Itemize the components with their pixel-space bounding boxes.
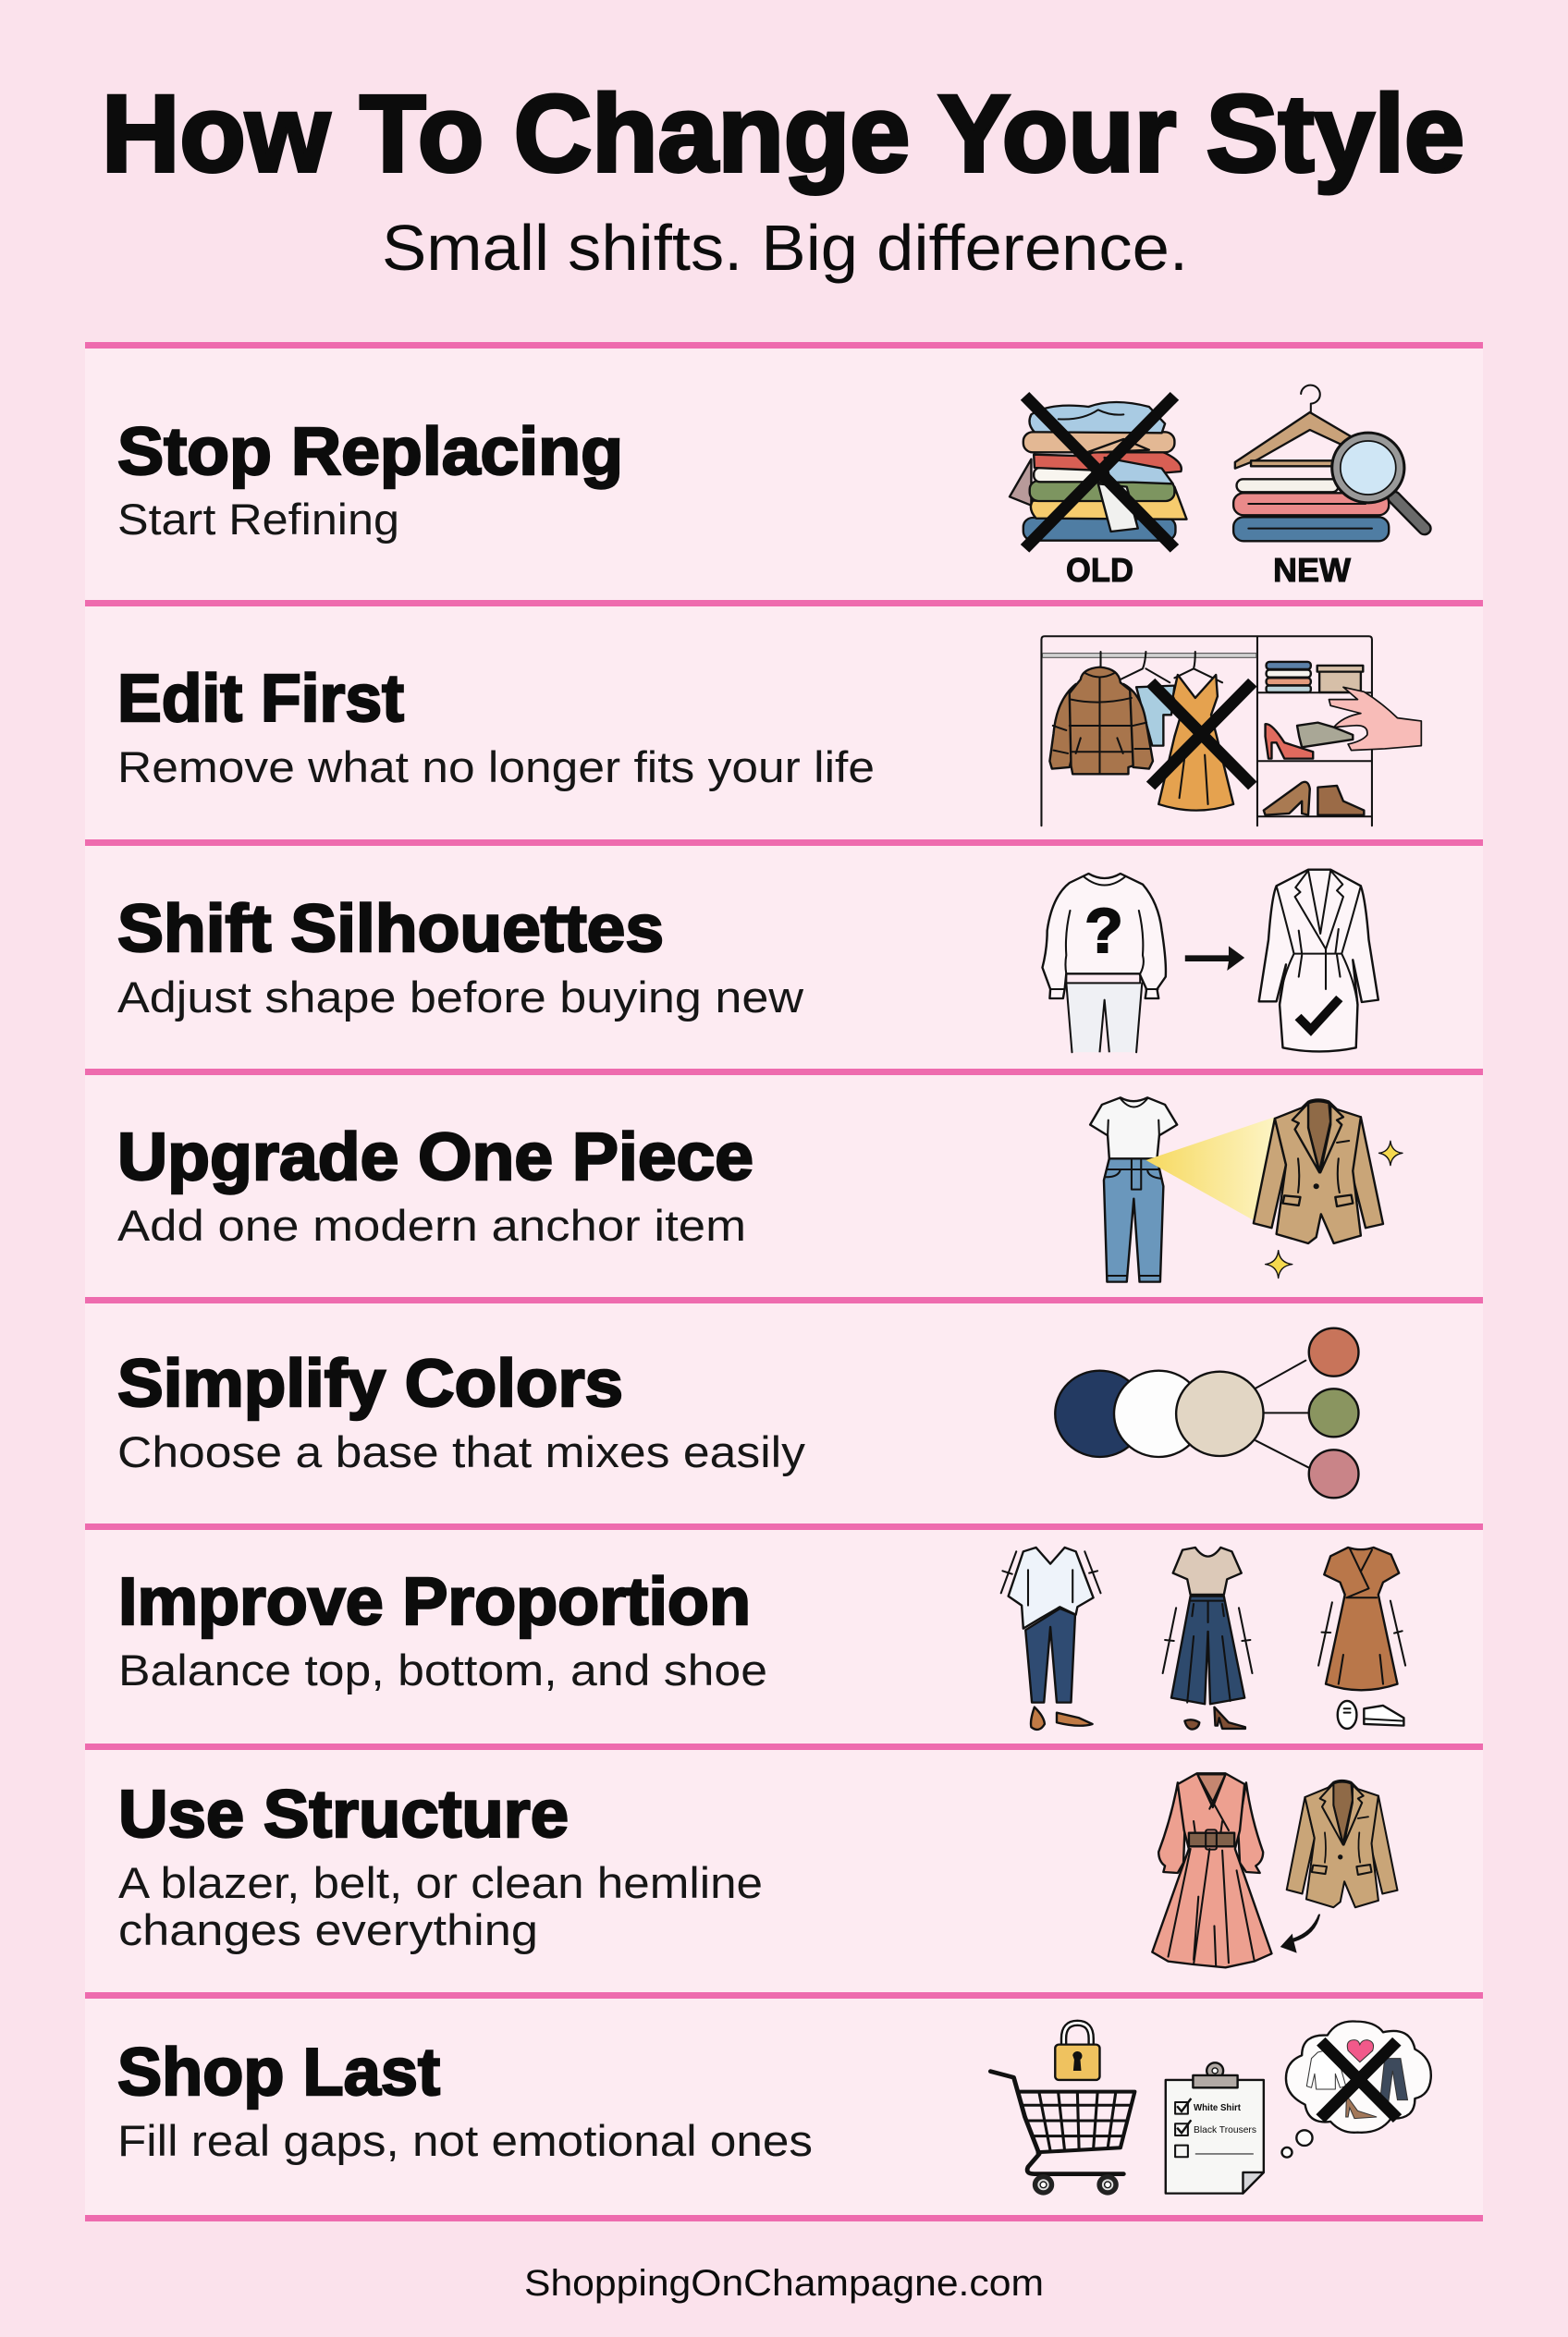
icon: old clothes pile crossed out	[1010, 396, 1187, 548]
icon: thought bubble crossed out	[1281, 2021, 1431, 2158]
heading: stop replacing: Stop Replacing	[117, 415, 623, 489]
outfit: wrap dress and sneakers	[1318, 1548, 1405, 1729]
divider lines	[85, 342, 1483, 2221]
checklist item: white shirt: White Shirt	[1194, 2102, 1241, 2113]
icon: shopping cart with lock	[990, 2023, 1134, 2193]
panel: upgrade one piece	[117, 1097, 1403, 1282]
panel: shop last	[117, 2021, 1431, 2194]
checklist item: black trousers: Black Trousers	[1194, 2124, 1256, 2135]
panel: edit first	[117, 636, 1421, 826]
heading: use structure: Use Structure	[118, 1778, 569, 1852]
label: new: NEW	[1273, 551, 1351, 589]
icon: outfit with spotlighted blazer	[1090, 1097, 1403, 1282]
content panel	[85, 345, 1483, 2218]
text: fill real gaps: Fill real gaps, not emotional ones	[117, 2116, 813, 2165]
text: add one modern anchor: Add one modern anchor item	[117, 1201, 746, 1250]
icon: check mark	[1298, 998, 1340, 1030]
panel: improve proportion	[118, 1548, 1405, 1730]
heading: improve proportion: Improve Proportion	[118, 1565, 751, 1639]
footer: website: ShoppingOnChampagne.com	[524, 2263, 1044, 2304]
jacket	[1049, 667, 1153, 774]
icon: color palette circles	[1055, 1328, 1358, 1498]
icon: closet edit	[1041, 636, 1421, 826]
dress	[1152, 1773, 1271, 1967]
heading: edit first: Edit First	[117, 662, 404, 736]
heading: upgrade one piece: Upgrade One Piece	[117, 1120, 753, 1194]
panel: shift silhouettes	[117, 870, 1378, 1052]
panel: use structure	[118, 1773, 1397, 1967]
text: balance top, bottom, and shoe: Balance top, bottom, and shoe	[118, 1646, 767, 1695]
icon: sweater to tailored dress	[1042, 870, 1378, 1052]
heading: shop last: Shop Last	[117, 2036, 440, 2110]
label: old: OLD	[1066, 551, 1133, 589]
title: How To Change Your Style	[102, 73, 1464, 195]
panel: stop replacing	[117, 385, 1425, 589]
text: choose a base: Choose a base that mixes easily	[117, 1427, 806, 1476]
text: start refining: Start Refining	[117, 495, 399, 544]
outfit: tee and wide trousers	[1163, 1548, 1252, 1730]
heading: shift silhouettes: Shift Silhouettes	[117, 892, 664, 966]
text: changes everything: changes everything	[118, 1905, 538, 1954]
panel: simplify colors	[117, 1328, 1358, 1498]
icon: belted dress and blazer	[1152, 1773, 1397, 1967]
icon: hanger, folded stack and magnifier	[1233, 385, 1425, 541]
text: adjust shape: Adjust shape before buying new	[117, 973, 804, 1022]
icon: question mark: ?	[1084, 896, 1123, 966]
text: a blazer, belt: A blazer, belt, or clean hemline	[118, 1858, 763, 1907]
icon: clipboard checklist	[1166, 2062, 1264, 2194]
text: remove what no longer fits: Remove what no longer fits your life	[117, 742, 875, 791]
heading: simplify colors: Simplify Colors	[117, 1347, 623, 1421]
outfit: blouse and slim jeans	[1001, 1548, 1101, 1730]
subtitle: Small shifts. Big difference.	[382, 212, 1188, 284]
icon: three balanced outfits	[1001, 1548, 1405, 1730]
